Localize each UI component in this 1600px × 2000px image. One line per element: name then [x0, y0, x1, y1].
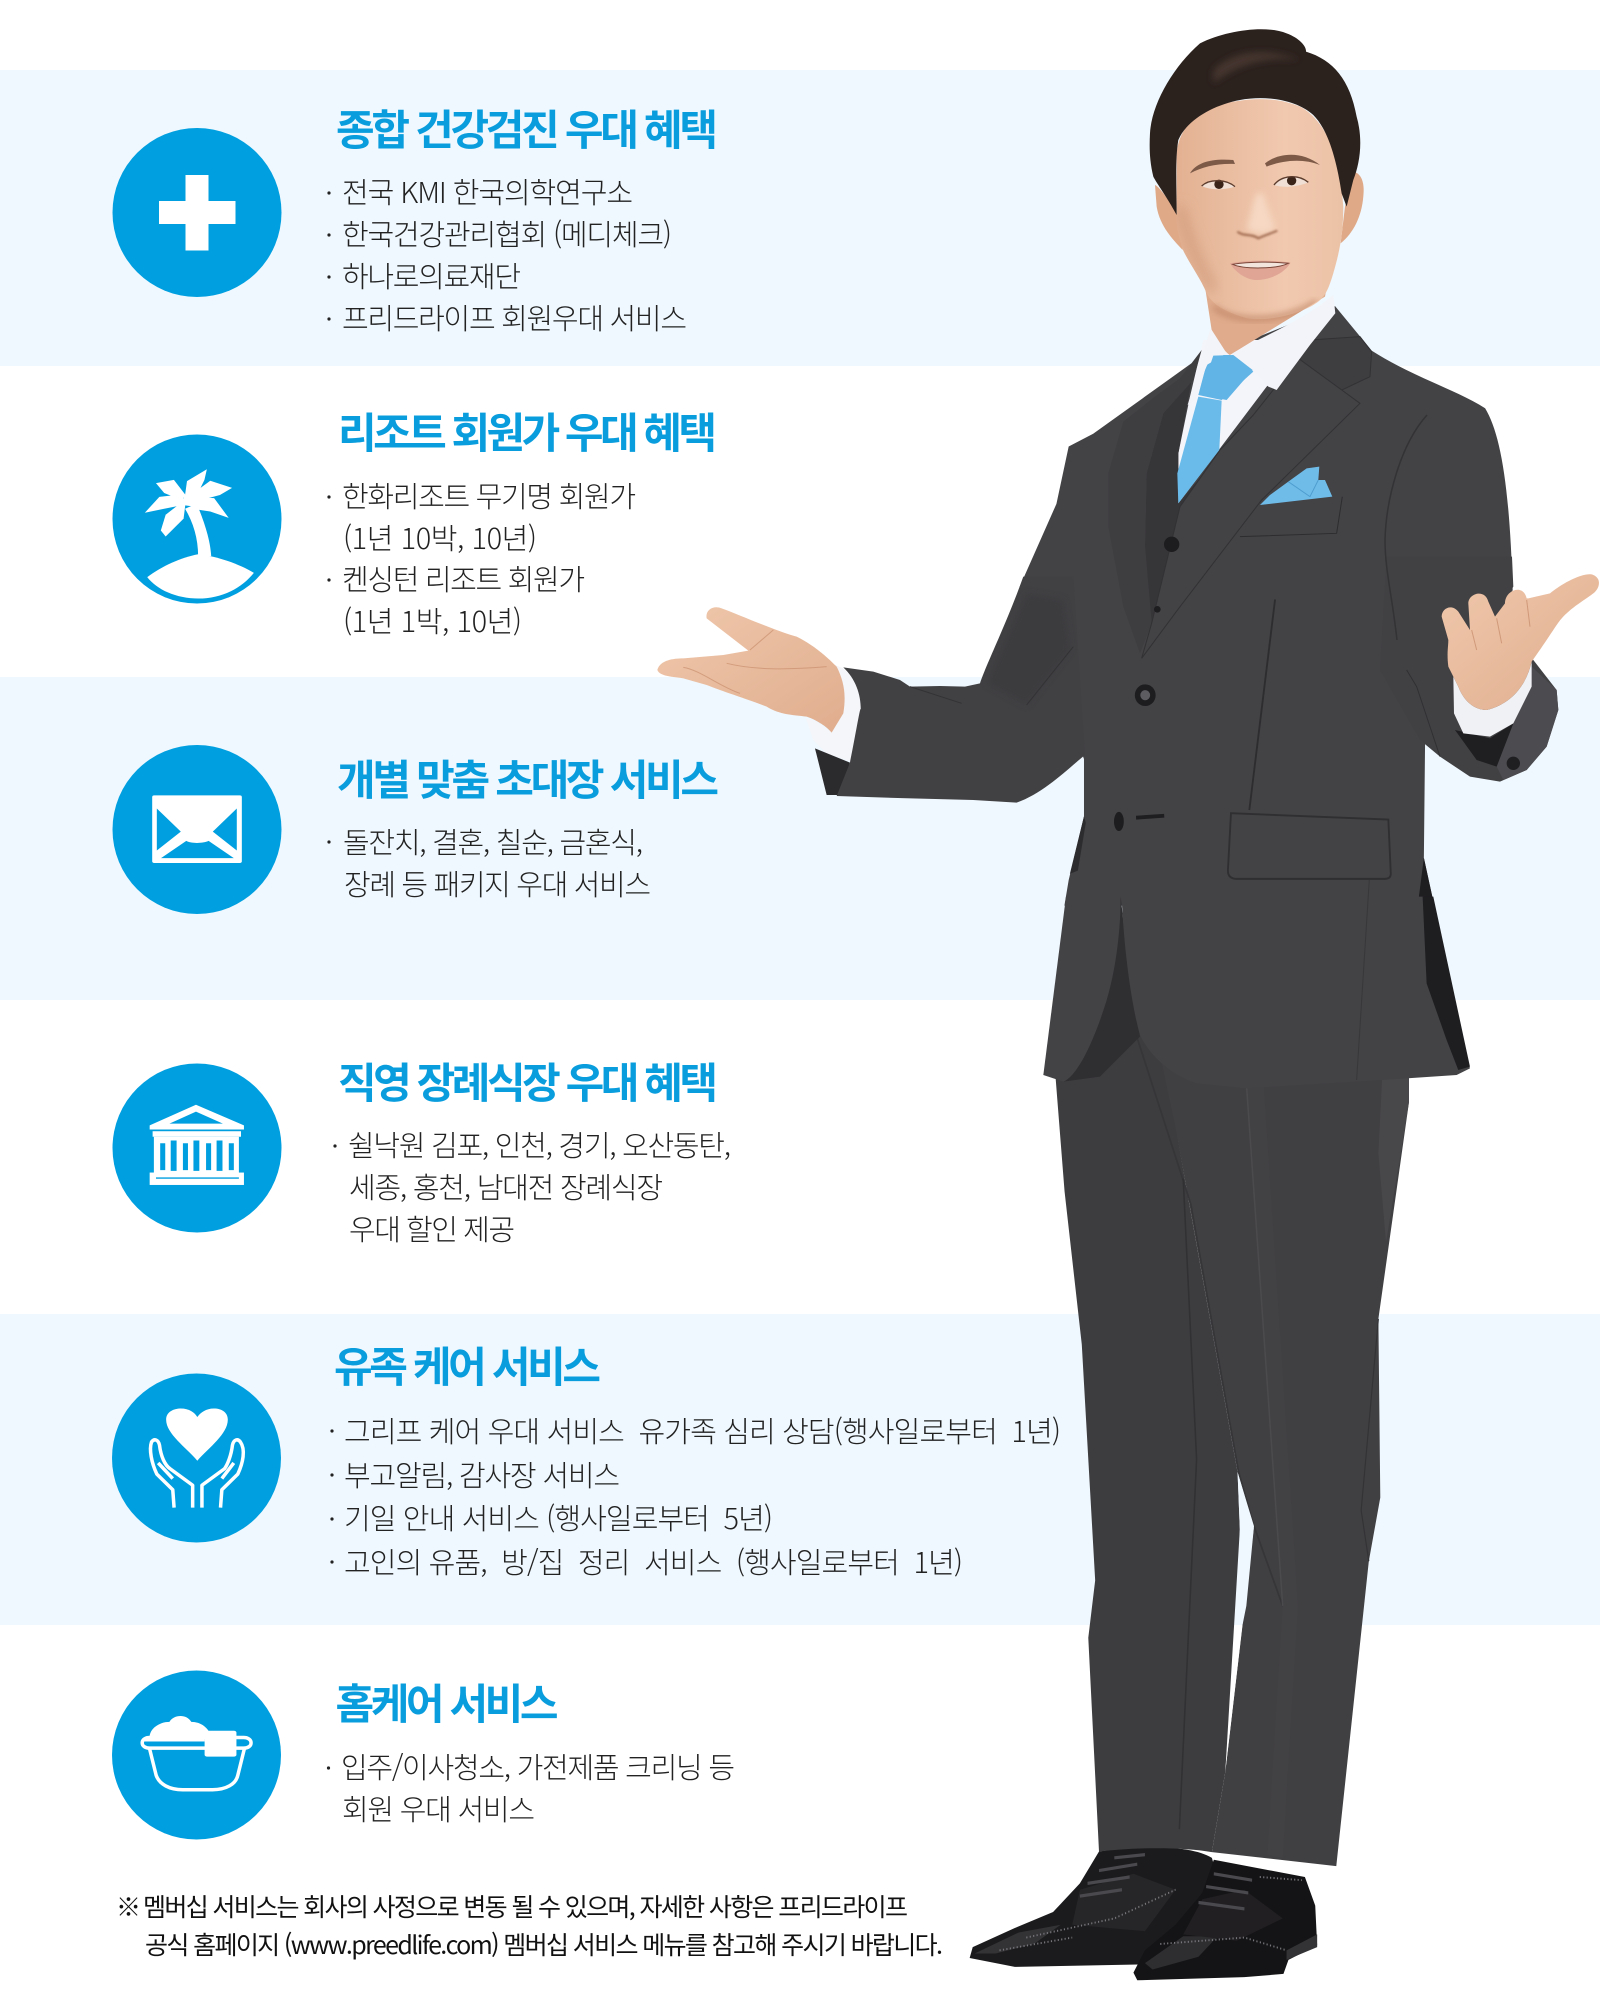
chest: shirt, waistcoat, lapels, tie and pocket square: [1108, 337, 1372, 658]
mouth: [1230, 261, 1291, 280]
heading: funeral hall discount: 직영 장례식장 우대 혜택: [338, 1050, 718, 1111]
heading: health check-up: 종합 건강검진 우대 혜택: [336, 97, 718, 158]
list: home care services: [327, 1745, 735, 1829]
list: home care services: 회원 우대 서비스: [342, 1787, 535, 1829]
icon: temple hall: [112, 1064, 282, 1232]
panel: custom invitations: [0, 677, 1600, 1000]
list: health check-up partners: [327, 170, 687, 338]
footnote: [116, 1888, 943, 1962]
list: invitation events: 돌잔치, 결혼, 칠순, 금혼식,: [343, 820, 643, 862]
list: health check-up partners: 하나로의료재단: [342, 254, 521, 296]
heading: custom invitations: 개별 맞춤 초대장 서비스: [337, 747, 719, 808]
gap between the legs: [1237, 1472, 1254, 1625]
heading: resort membership: 리조트 회원가 우대 혜택: [338, 400, 717, 461]
list: bereaved family services: 그리프 케어 우대 서비스 유가족 심리 상담(행사일로부터 1년): [344, 1409, 1061, 1451]
list: bereaved family services: 기일 안내 서비스 (행사일로부터 5년): [344, 1496, 773, 1538]
list: health check-up partners: 한국건강관리협회 (메디체크): [342, 212, 672, 254]
icon: envelope: [112, 745, 282, 914]
list: bereaved family services: 부고알림, 감사장 서비스: [344, 1453, 620, 1495]
footnote: ※: [116, 1888, 141, 1924]
icon: palm tree island: [112, 434, 282, 604]
eyebrows: [1190, 160, 1235, 173]
list: funeral hall locations: 쉴낙원 김포, 인천, 경기, 오산동탄,: [348, 1123, 731, 1165]
list: home care services: 입주/이사청소, 가전제품 크리닝 등: [341, 1745, 735, 1787]
list: resort memberships: 한화리조트 무기명 회원가: [342, 474, 636, 516]
jacket skirt: [1043, 880, 1470, 1088]
head: [1150, 29, 1364, 405]
footnote: 멤버십 서비스는 회사의 사정으로 변동 될 수 있으며, 자세한 사항은 프리드라이프: [143, 1888, 908, 1924]
list: resort memberships: (1년 10박, 10년): [343, 516, 537, 558]
nose: [1247, 193, 1275, 233]
left sleeve, cuff and hand: [657, 577, 1085, 803]
icon: heart in hands: [112, 1374, 281, 1542]
panel: home care: [112, 1670, 735, 1840]
right arm seam: [1385, 415, 1427, 640]
jacket body: [1020, 306, 1513, 906]
list: funeral hall locations: 세종, 홍천, 남대전 장례식장: [349, 1165, 663, 1207]
panel: resort membership: [112, 400, 717, 641]
list: bereaved family services: [330, 1409, 1061, 1582]
panel: funeral hall discount: [112, 1050, 731, 1249]
list: invitation events: 장례 등 패키지 우대 서비스: [344, 862, 651, 904]
list: bereaved family services: 고인의 유품, 방/집 정리 서비스 (행사일로부터 1년): [344, 1540, 963, 1582]
list: resort memberships: (1년 1박, 10년): [343, 599, 522, 641]
figure: man in grey three-piece suit gesturing: [657, 29, 1599, 1980]
list: invitation events: [327, 820, 651, 904]
right sleeve, cuff and hand: [1380, 557, 1599, 782]
list: resort memberships: [327, 474, 636, 641]
icon: medical cross: [112, 128, 282, 297]
shoes and trousers: [970, 949, 1409, 1980]
eyes: [1202, 181, 1235, 189]
footnote: 공식 홈페이지 (www.preedlife.com) 멤버십 서비스 메뉴를 참고해 주시기 바랍니다.: [145, 1926, 943, 1962]
heading: bereaved family care: 유족 케어 서비스: [334, 1334, 601, 1395]
heading: home care: 홈케어 서비스: [336, 1671, 558, 1732]
panel: health check-up: [0, 70, 1600, 366]
list: funeral hall locations: 우대 할인 제공: [349, 1207, 515, 1249]
list: funeral hall locations: [333, 1123, 731, 1249]
list: resort memberships: 켄싱턴 리조트 회원가: [342, 557, 585, 599]
panel: bereaved family care: [0, 1314, 1600, 1625]
icon: wash basin: [112, 1670, 281, 1840]
list: health check-up partners: 프리드라이프 회원우대 서비스: [342, 296, 687, 338]
list: health check-up partners: 전국 KMI 한국의학연구소: [342, 170, 633, 212]
